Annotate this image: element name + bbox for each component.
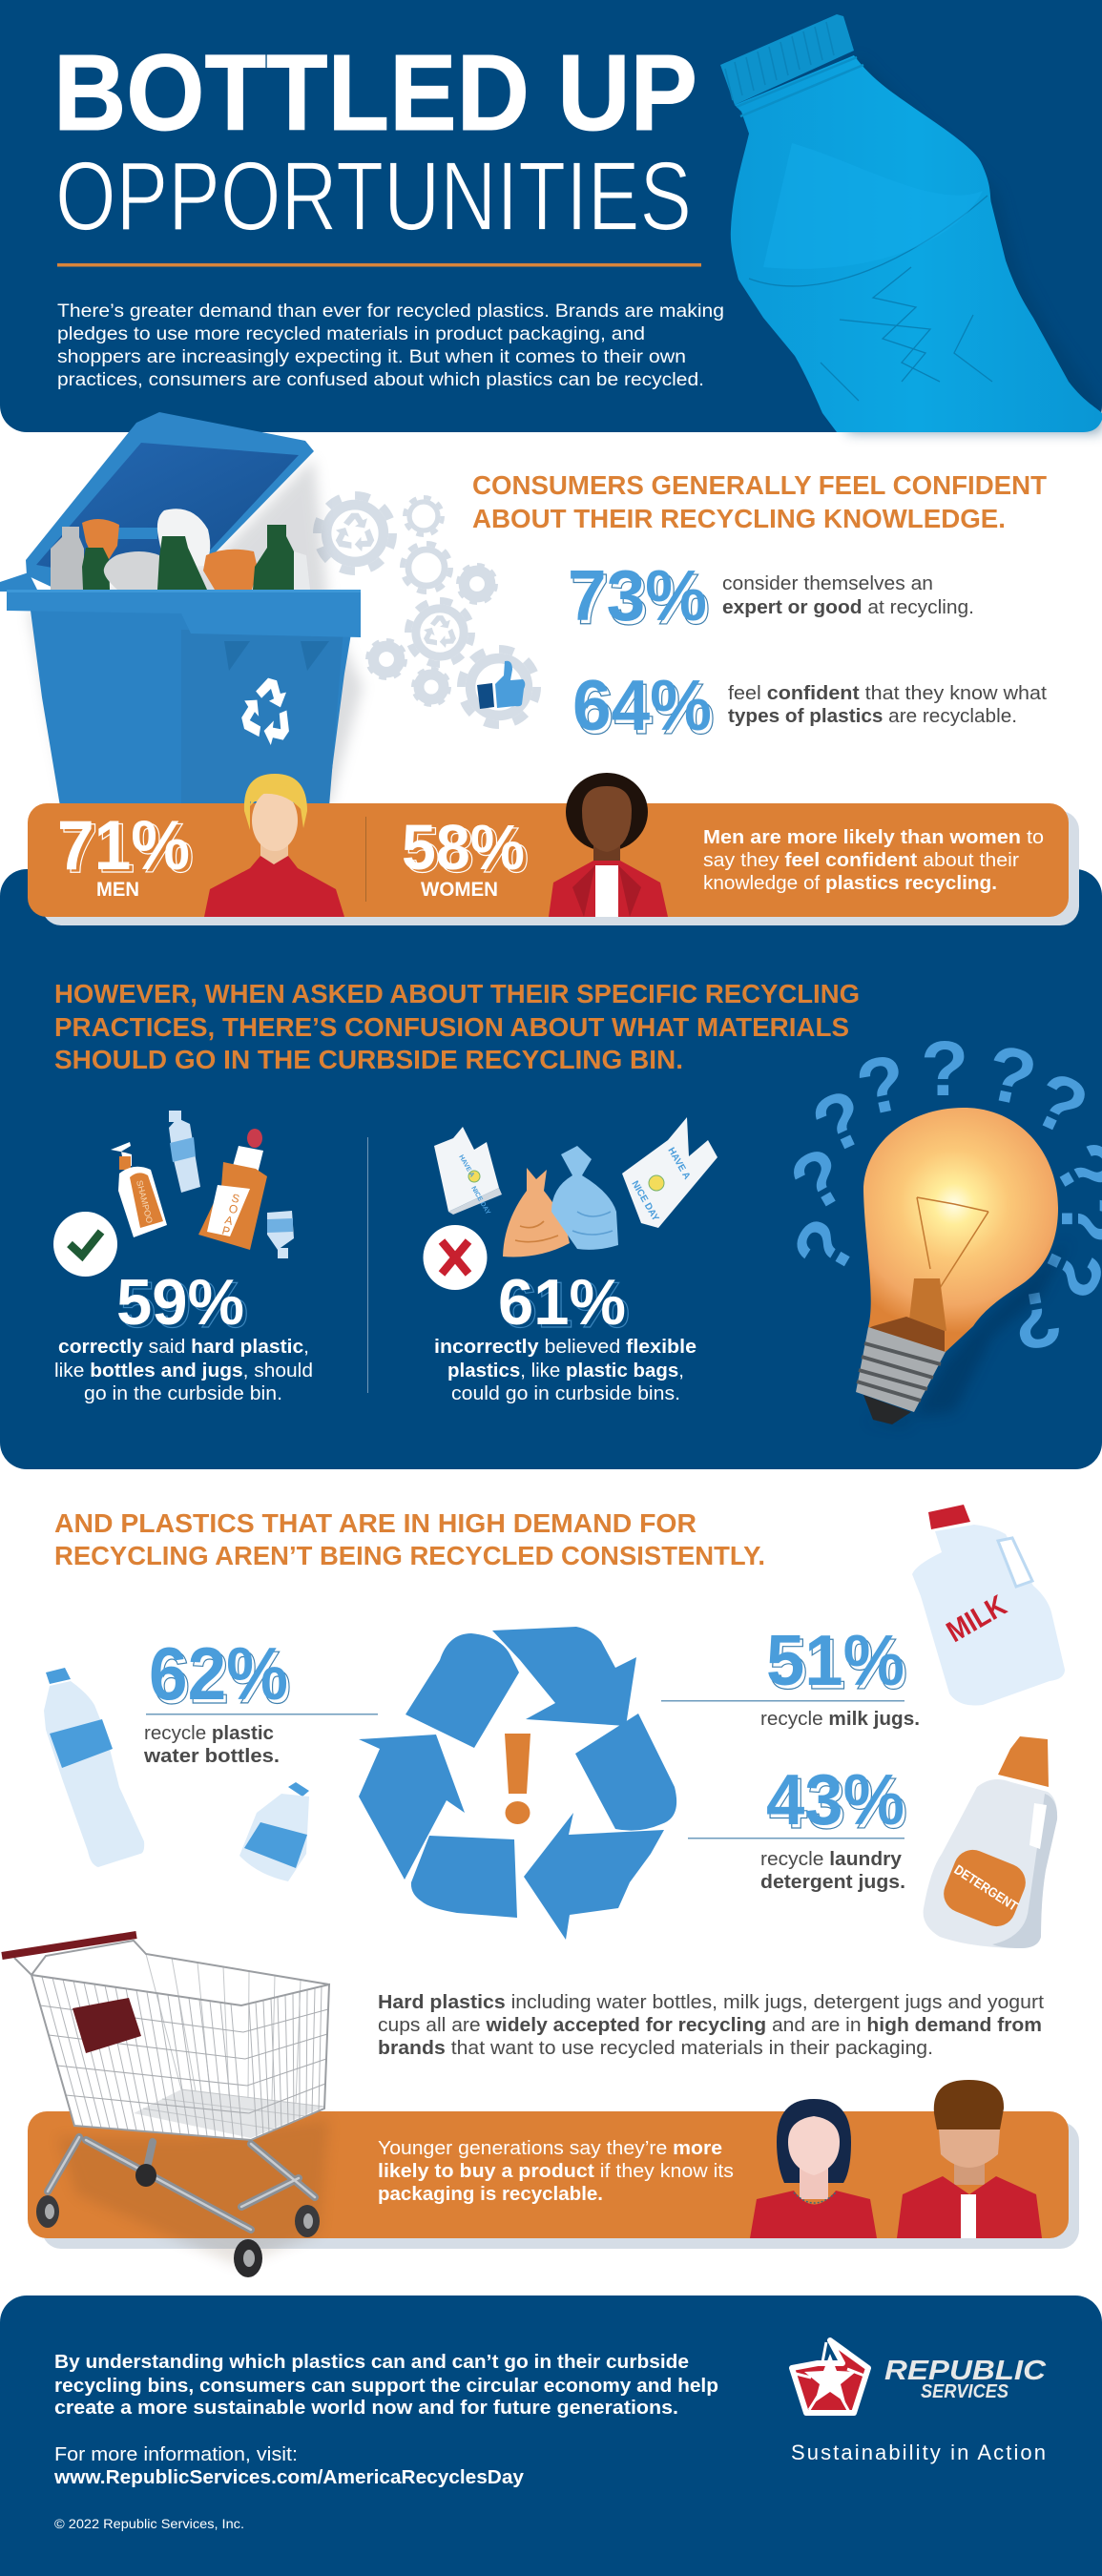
- text: copyright: © 2022 Republic Services, Inc.: [54, 2516, 244, 2531]
- icon: soap: SOAP: [220, 1191, 241, 1238]
- text: men more likely: Men are more likely than women to: [703, 827, 1044, 848]
- illustration: woman: [549, 773, 668, 917]
- text: younger generations: likely to buy a product if they know its: [378, 2161, 734, 2182]
- illustration: young man: [897, 2080, 1042, 2238]
- panel: header: [0, 0, 1102, 432]
- text: expert or good: expert or good at recycling.: [722, 597, 974, 618]
- intro text: There’s greater demand than ever for recycled plastics. Brands are making: [57, 301, 724, 322]
- stat: 64 percent: 64%: [575, 669, 715, 749]
- stat: 62 percent plastic water bottles: recycle plastic: [144, 1723, 274, 1744]
- stat: 73 percent: 73%: [571, 559, 710, 639]
- icon: thumbs up: [477, 661, 525, 709]
- illustration: man: [204, 774, 344, 917]
- text: incorrectly believed: incorrectly believed flexible: [434, 1337, 697, 1358]
- stat: 51 percent milk jugs: [661, 1620, 920, 1730]
- heading: high demand: RECYCLING AREN’T BEING RECYCLED CONSISTENTLY.: [54, 1541, 765, 1570]
- bin bottles: [51, 509, 310, 590]
- stat: 64 percent: 64%: [572, 665, 712, 745]
- icon: crumpled plastic bottle: [720, 14, 1102, 432]
- intro text: [57, 301, 724, 390]
- intro text: pledges to use more recycled materials in product packaging, and: [57, 324, 645, 344]
- icon: shampoo: [111, 1142, 167, 1237]
- icon: shampoo: SHAMPOO: [135, 1179, 155, 1224]
- text: incorrectly believed: could go in curbside bins.: [451, 1383, 680, 1404]
- icon: recycling bin full of bottles: [0, 412, 363, 806]
- icon: plastic bag right: [622, 1117, 717, 1228]
- divider: [365, 817, 366, 902]
- heading: confusion: HOWEVER, WHEN ASKED ABOUT THEIR SPECIFIC RECYCLING: [54, 979, 860, 1008]
- stat: 71 percent men: 71%: [61, 810, 194, 887]
- intro text: practices, consumers are confused about which plastics can be recycled.: [57, 370, 704, 390]
- stat: 73 percent: 73%: [568, 555, 707, 635]
- bin lid: [26, 412, 314, 590]
- stat: 51 percent milk jugs: 51%: [766, 1620, 904, 1700]
- panel: confusion section background: [0, 869, 1102, 1469]
- question marks: [776, 1026, 1102, 1366]
- illustration: hard plastics: [53, 1111, 294, 1277]
- stat: 58 percent women: WOMEN: [421, 879, 498, 901]
- text: confident types: types of plastics are recyclable.: [728, 706, 1017, 727]
- text: men more likely: say they feel confident about their: [703, 850, 1019, 871]
- icon: plastic bag left: HAVE A: [457, 1154, 475, 1178]
- question marks: ?: [979, 1028, 1044, 1124]
- cart wheels: [36, 2164, 320, 2277]
- stat: 58 percent women: 58%: [402, 812, 525, 883]
- heading: confident: CONSUMERS GENERALLY FEEL CONFIDENT: [472, 470, 1047, 500]
- icon: gear recycle large: [317, 495, 393, 571]
- heading: confusion: SHOULD GO IN THE CURBSIDE RECYCLING BIN.: [54, 1045, 683, 1074]
- text: hard plastics: Hard plastics including water bottles, milk jugs, detergent jugs and yogurt: [378, 1992, 1044, 2013]
- text: tagline: Sustainability in Action: [791, 2441, 1046, 2464]
- icon: plastic bag right: HAVE A: [665, 1146, 692, 1181]
- illustration: flexible plastics: [424, 1117, 717, 1290]
- title: opportunities: OPPORTUNITIES: [55, 141, 692, 251]
- bulb shadow: [863, 1240, 1069, 1426]
- icon: x mark: [424, 1225, 487, 1290]
- stat: 51 percent milk jugs: recycle milk jugs.: [760, 1709, 920, 1730]
- illustration: light bulb with question marks: [776, 1026, 1102, 1426]
- question marks: ?: [921, 1026, 968, 1112]
- text: more information: For more information, visit:: [54, 2444, 298, 2465]
- heading: confusion: [54, 979, 860, 1074]
- text: correctly said: [54, 1337, 313, 1404]
- logo: republic services: REPUBLIC: [884, 2356, 1047, 2386]
- bulb screw base: [856, 1327, 946, 1424]
- heading: high demand: AND PLASTICS THAT ARE IN HIGH DEMAND FOR: [54, 1508, 697, 1538]
- intro text: shoppers are increasingly expecting it. But when it comes to their own: [57, 347, 686, 367]
- question marks: ?: [776, 1205, 875, 1290]
- title: bottled up: BOTTLED UP: [53, 32, 697, 153]
- question marks: ?: [1020, 1055, 1100, 1153]
- text: hard plastics: cups all are widely accepted for recycling and are in high demand from: [378, 2015, 1042, 2036]
- icon: small water bottle: [239, 1782, 309, 1881]
- icon: milk jug: MILK: [941, 1588, 1012, 1649]
- panel: footer: [0, 2296, 1102, 2576]
- icon: shopping cart: [2, 1935, 329, 2277]
- gears group: [317, 495, 537, 725]
- stat: 61 percent: 61%: [498, 1266, 626, 1339]
- stat: 62 percent plastic water bottles: 62%: [152, 1635, 291, 1719]
- text: closing statement: create a more sustainable world now and for future generations.: [54, 2398, 678, 2419]
- text: incorrectly believed: [434, 1337, 697, 1404]
- icon: gear recycle medium: [408, 601, 471, 664]
- icon: soap: [198, 1129, 267, 1250]
- icon: plastic bag left: NICE DAY: [469, 1185, 491, 1216]
- question marks: ?: [1006, 1273, 1068, 1366]
- icon: orange bag: [503, 1168, 570, 1257]
- title rule: [57, 263, 701, 267]
- heading: confident: [472, 470, 1047, 533]
- text: expert or good: consider themselves an: [722, 573, 933, 594]
- heading: confusion: PRACTICES, THERE’S CONFUSION ABOUT WHAT MATERIALS: [54, 1012, 849, 1042]
- text: correctly said: like bottles and jugs , should: [54, 1361, 313, 1381]
- text: closing statement: By understanding which plastics can and can’t go in their curbside: [54, 2352, 689, 2373]
- text: more information: [53, 2444, 525, 2488]
- text: men more likely: knowledge of plastics recycling.: [703, 873, 997, 894]
- stat: 43 percent detergent jugs: 43%: [769, 1763, 907, 1843]
- text: closing statement: [54, 2352, 718, 2419]
- cart flap: [73, 1998, 141, 2053]
- icon: large water bottle: [44, 1668, 144, 1867]
- heading: high demand: [54, 1508, 765, 1570]
- bin body: [7, 590, 361, 806]
- stat: 71 percent men: 71%: [57, 807, 190, 884]
- text: closing statement: recycling bins, consumers can support the circular economy and help: [54, 2376, 718, 2397]
- text: correctly said: go in the curbside bin.: [84, 1383, 282, 1404]
- stat: 62 percent plastic water bottles: 62%: [149, 1631, 288, 1715]
- logo: republic services: SERVICES: [921, 2381, 1009, 2402]
- icon: check mark: [53, 1212, 117, 1277]
- logo: republic services: [792, 2340, 1047, 2413]
- stat: 43 percent detergent jugs: detergent jugs.: [760, 1872, 905, 1893]
- heading: confident: ABOUT THEIR RECYCLING KNOWLEDGE.: [472, 504, 1006, 533]
- stat: 62 percent plastic water bottles: water bottles.: [143, 1746, 280, 1767]
- text: confident types: feel confident that they know what: [728, 683, 1047, 704]
- text: confident types: [728, 683, 1047, 727]
- stat: 43 percent detergent jugs: [688, 1759, 907, 1893]
- question marks: ?: [800, 1072, 880, 1172]
- icon: paper recycling symbol: [359, 1627, 676, 1940]
- icon: water bottle: [169, 1111, 200, 1193]
- stat: 51 percent milk jugs: 51%: [769, 1624, 907, 1704]
- stat: 61 percent: 61%: [502, 1269, 630, 1341]
- recycle symbol on bin: [233, 671, 301, 756]
- stat: 59 percent: 59%: [120, 1269, 248, 1341]
- question marks: ?: [777, 1131, 862, 1230]
- stat: 71 percent men: MEN: [96, 879, 139, 901]
- text: correctly said: correctly said hard plastic ,: [58, 1337, 309, 1358]
- question marks: ?: [849, 1038, 914, 1133]
- bulb filament: [917, 1197, 988, 1288]
- exclamation mark: [505, 1734, 530, 1824]
- text: more information: www.RepublicServices.com/AmericaRecyclesDay: [53, 2467, 525, 2488]
- icon: milk jug: [912, 1505, 1065, 1706]
- icon: blue bag: [551, 1146, 618, 1250]
- text: hard plastics: [378, 1992, 1044, 2059]
- text: incorrectly believed: plastics, like plastic bags,: [447, 1361, 684, 1381]
- stat: 43 percent detergent jugs: 43%: [766, 1759, 904, 1839]
- stat: 62 percent plastic water bottles: [143, 1631, 378, 1767]
- bulb glass: [863, 1108, 1058, 1352]
- cart frame: [48, 2137, 315, 2230]
- text: men more likely: [703, 827, 1044, 894]
- stat: 43 percent detergent jugs: recycle laundry: [760, 1849, 903, 1870]
- icon: plastic bag left: [434, 1127, 502, 1216]
- icon: upside-down bottle: [267, 1211, 294, 1258]
- icon: detergent bottle: [924, 1736, 1057, 1948]
- stat: 58 percent women: 58%: [405, 815, 529, 886]
- cart handle: [2, 1935, 136, 1956]
- illustration: young woman: [750, 2099, 877, 2238]
- panel: men vs women: [28, 773, 1079, 925]
- stat: 59 percent: 59%: [116, 1266, 244, 1339]
- text: younger generations: [378, 2138, 734, 2205]
- panel: younger generations: [28, 2080, 1079, 2249]
- cart basket: [2, 1935, 329, 2140]
- text: hard plastics: brands that want to use recycled materials in their packaging.: [378, 2038, 933, 2059]
- text: younger generations: packaging is recyclable.: [378, 2184, 603, 2205]
- icon: detergent bottle: DETERGENT: [951, 1861, 1021, 1914]
- divider: [367, 1137, 368, 1393]
- text: expert or good: [722, 573, 974, 618]
- icon: plastic bag right: NICE DAY: [629, 1179, 661, 1223]
- text: younger generations: Younger generations say they’re more: [378, 2138, 722, 2159]
